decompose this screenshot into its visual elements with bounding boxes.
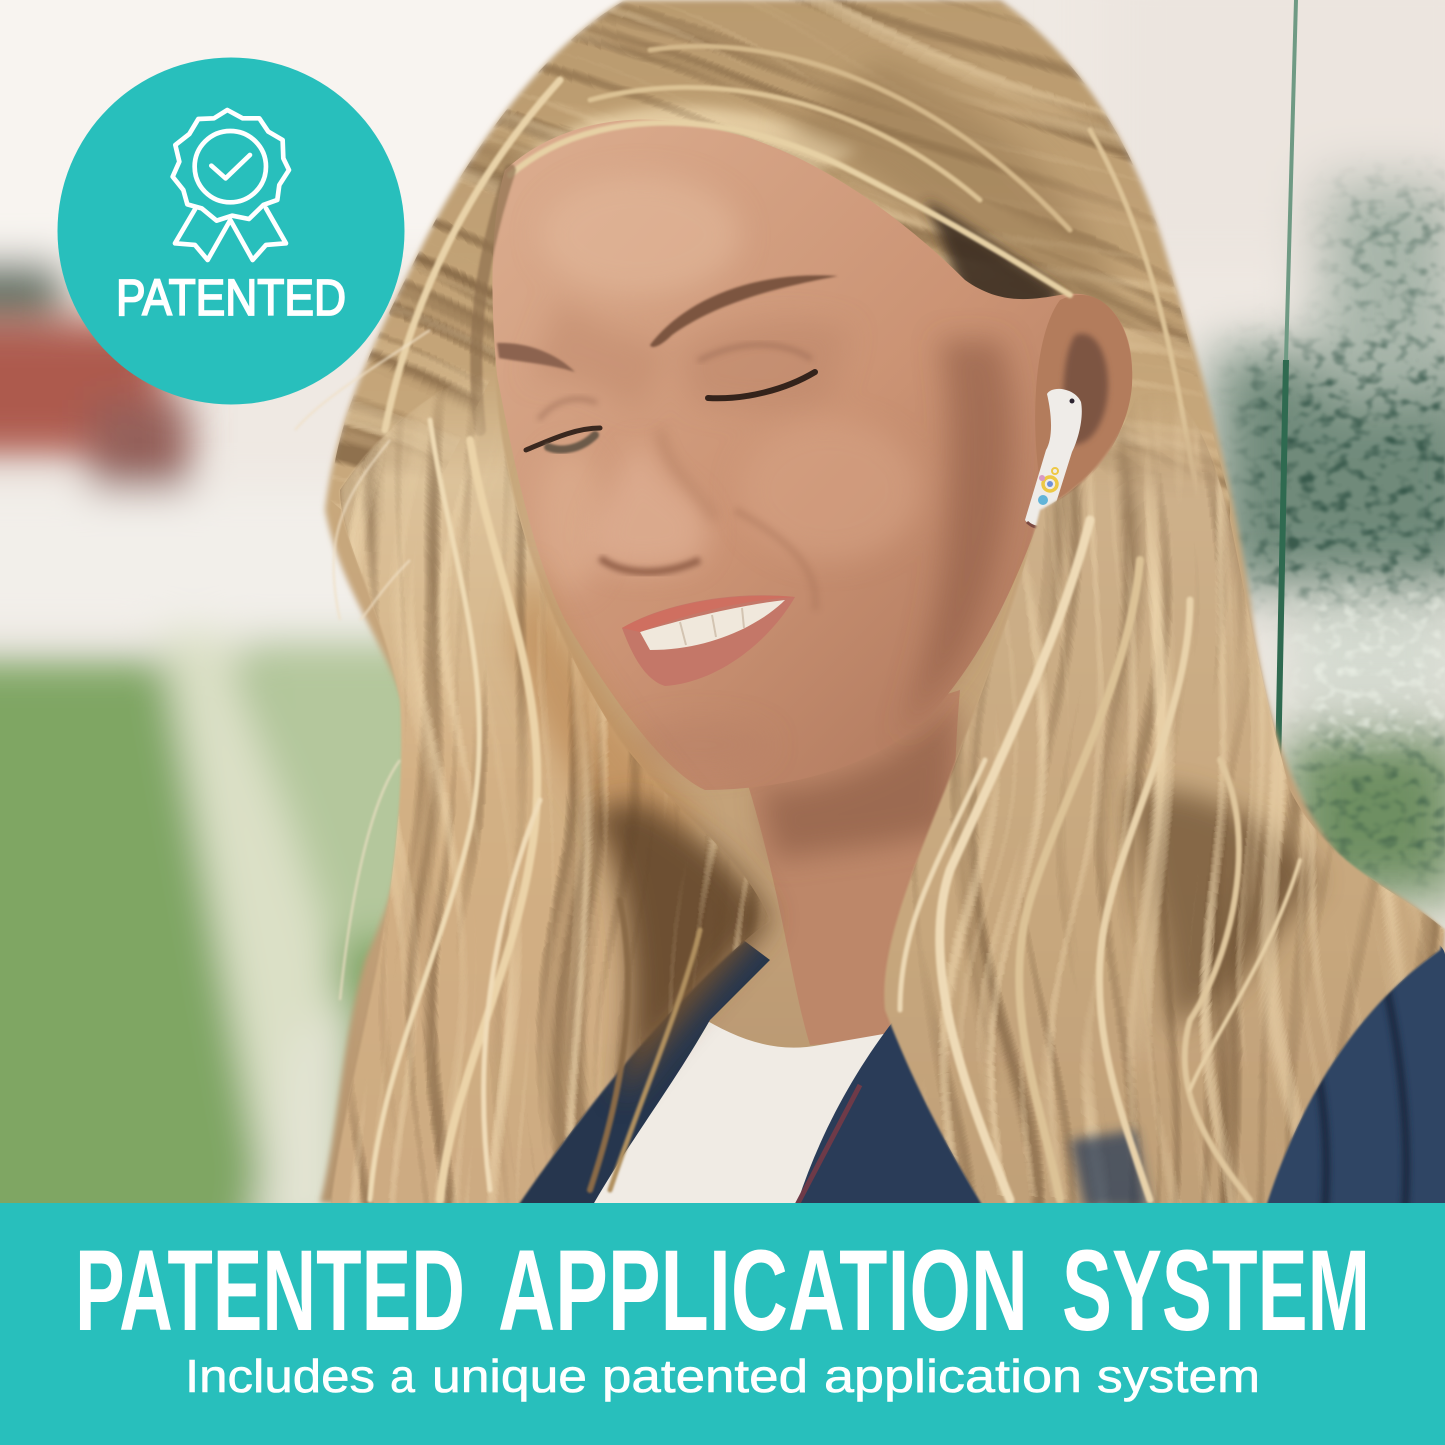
badge label: PATENTED [116, 269, 346, 326]
banner subheading: unique [432, 1350, 587, 1402]
white t-shirt [594, 1022, 884, 1203]
hair back mass [317, 0, 1445, 1203]
eyes [526, 345, 815, 450]
banner subheading: system [1097, 1350, 1260, 1402]
eyebrows [497, 275, 838, 372]
right hair lock [870, 380, 1445, 1220]
banner heading: APPLICATION [498, 1227, 1028, 1355]
face shading [530, 175, 1014, 769]
banner subheading: patented [602, 1350, 808, 1402]
denim jacket [518, 940, 1445, 1203]
wispy hair edge [295, 330, 430, 1000]
face [492, 119, 1132, 790]
left hair lock [295, 330, 800, 1220]
mouth [622, 595, 795, 686]
bottom banner [0, 1203, 1445, 1445]
banner subheading: a [390, 1350, 415, 1402]
banner heading: PATENTED [75, 1227, 465, 1355]
banner subheading [185, 1350, 1260, 1402]
neck [740, 690, 960, 1045]
icon: award rosette with check [173, 110, 289, 260]
frosted glass wall [1194, 0, 1445, 930]
patented badge [58, 58, 404, 404]
banner heading [75, 1227, 1370, 1355]
ear [1035, 295, 1132, 505]
banner subheading: Includes [185, 1350, 375, 1402]
nose [592, 430, 816, 610]
banner subheading: application [824, 1350, 1082, 1402]
hair strands top [381, 43, 1196, 478]
earbud with floral pattern [1025, 389, 1082, 527]
